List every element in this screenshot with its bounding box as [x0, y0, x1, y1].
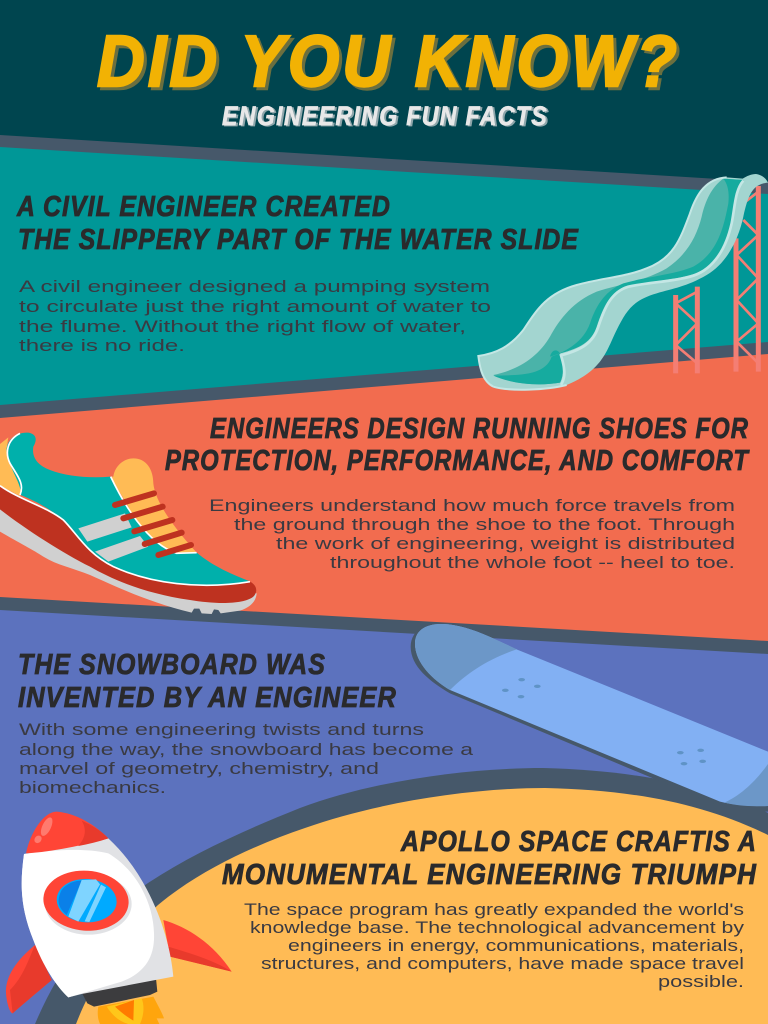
text: water slide body: A civil engineer designed a pumping system [19, 277, 490, 296]
rocket body [22, 838, 173, 997]
text: water slide body [19, 277, 491, 355]
text: snowboard body: along the way, the snowboard has become a [19, 740, 474, 759]
subtitle: ENGINEERING FUN FACTS [224, 102, 550, 132]
slide support towers [676, 186, 758, 373]
icon: water slide [478, 174, 768, 390]
panel: water slide fact background [0, 135, 768, 420]
text: running shoes body [209, 496, 735, 572]
icon: rocket [6, 812, 232, 1024]
heading: snowboard: INVENTED BY AN ENGINEER [18, 682, 397, 714]
panel: running shoes fact background [0, 342, 768, 660]
text: water slide body: to circulate just the right amount of water to [19, 297, 491, 316]
rocket fins [6, 920, 232, 1013]
text: running shoes body: the ground through the shoe to the foot. Through [234, 515, 735, 534]
slide body [478, 174, 768, 390]
text: apollo body: possible. [658, 972, 744, 991]
text: snowboard body [19, 720, 474, 797]
panel: apollo fact background arc [35, 768, 768, 1024]
shoe sole [0, 487, 257, 614]
shoe stripes [78, 513, 148, 562]
text: water slide body: there is no ride. [19, 336, 185, 355]
text: running shoes body: throughout the whole foot -- heel to toe. [330, 553, 735, 572]
text: apollo body: engineers in energy, communications, materials, [288, 936, 744, 955]
shoe laces [115, 493, 191, 555]
snowboard nose and tail [415, 624, 768, 806]
heading: apollo [222, 826, 757, 891]
title: DID YOU KNOW? [100, 25, 683, 105]
text: snowboard body: marvel of geometry, chemistry, and [19, 759, 379, 778]
text: running shoes body: the work of engineering, weight is distributed [276, 534, 735, 553]
text: apollo body [244, 900, 745, 991]
text: apollo body: knowledge base. The technological advancement by [250, 918, 745, 937]
subtitle: ENGINEERING FUN FACTS [222, 101, 548, 131]
heading: running shoes [165, 413, 750, 477]
snowboard screws [502, 678, 706, 765]
text: snowboard body: With some engineering twists and turns [19, 720, 424, 739]
text: apollo body: The space program has greatly expanded the world's [244, 900, 744, 919]
heading: water slide: A CIVIL ENGINEER CREATED [16, 191, 391, 223]
snowboard edge shadow [411, 623, 768, 812]
rocket window [41, 868, 132, 935]
text: water slide body: the flume. Without the right flow of water, [19, 317, 466, 336]
text: snowboard body: biomechanics. [19, 778, 166, 797]
snowboard deck [415, 624, 768, 806]
heading: water slide: THE SLIPPERY PART OF THE WATER SLIDE [18, 224, 579, 256]
rocket nozzle [82, 978, 157, 1007]
text: apollo body: structures, and computers, have made space travel [261, 954, 744, 973]
title: DID YOU KNOW? [97, 22, 680, 102]
rocket flame [98, 997, 164, 1024]
icon: snowboard [411, 623, 768, 812]
heading: water slide [16, 191, 579, 256]
shoe upper [0, 433, 250, 585]
heading: snowboard: THE SNOWBOARD WAS [18, 649, 326, 681]
text: running shoes body: Engineers understand how much force travels from [209, 496, 735, 515]
icon: running shoe [0, 433, 257, 614]
rocket nose cone [26, 812, 108, 853]
heading: snowboard [18, 649, 397, 714]
panel: snowboard fact background [0, 597, 768, 1024]
